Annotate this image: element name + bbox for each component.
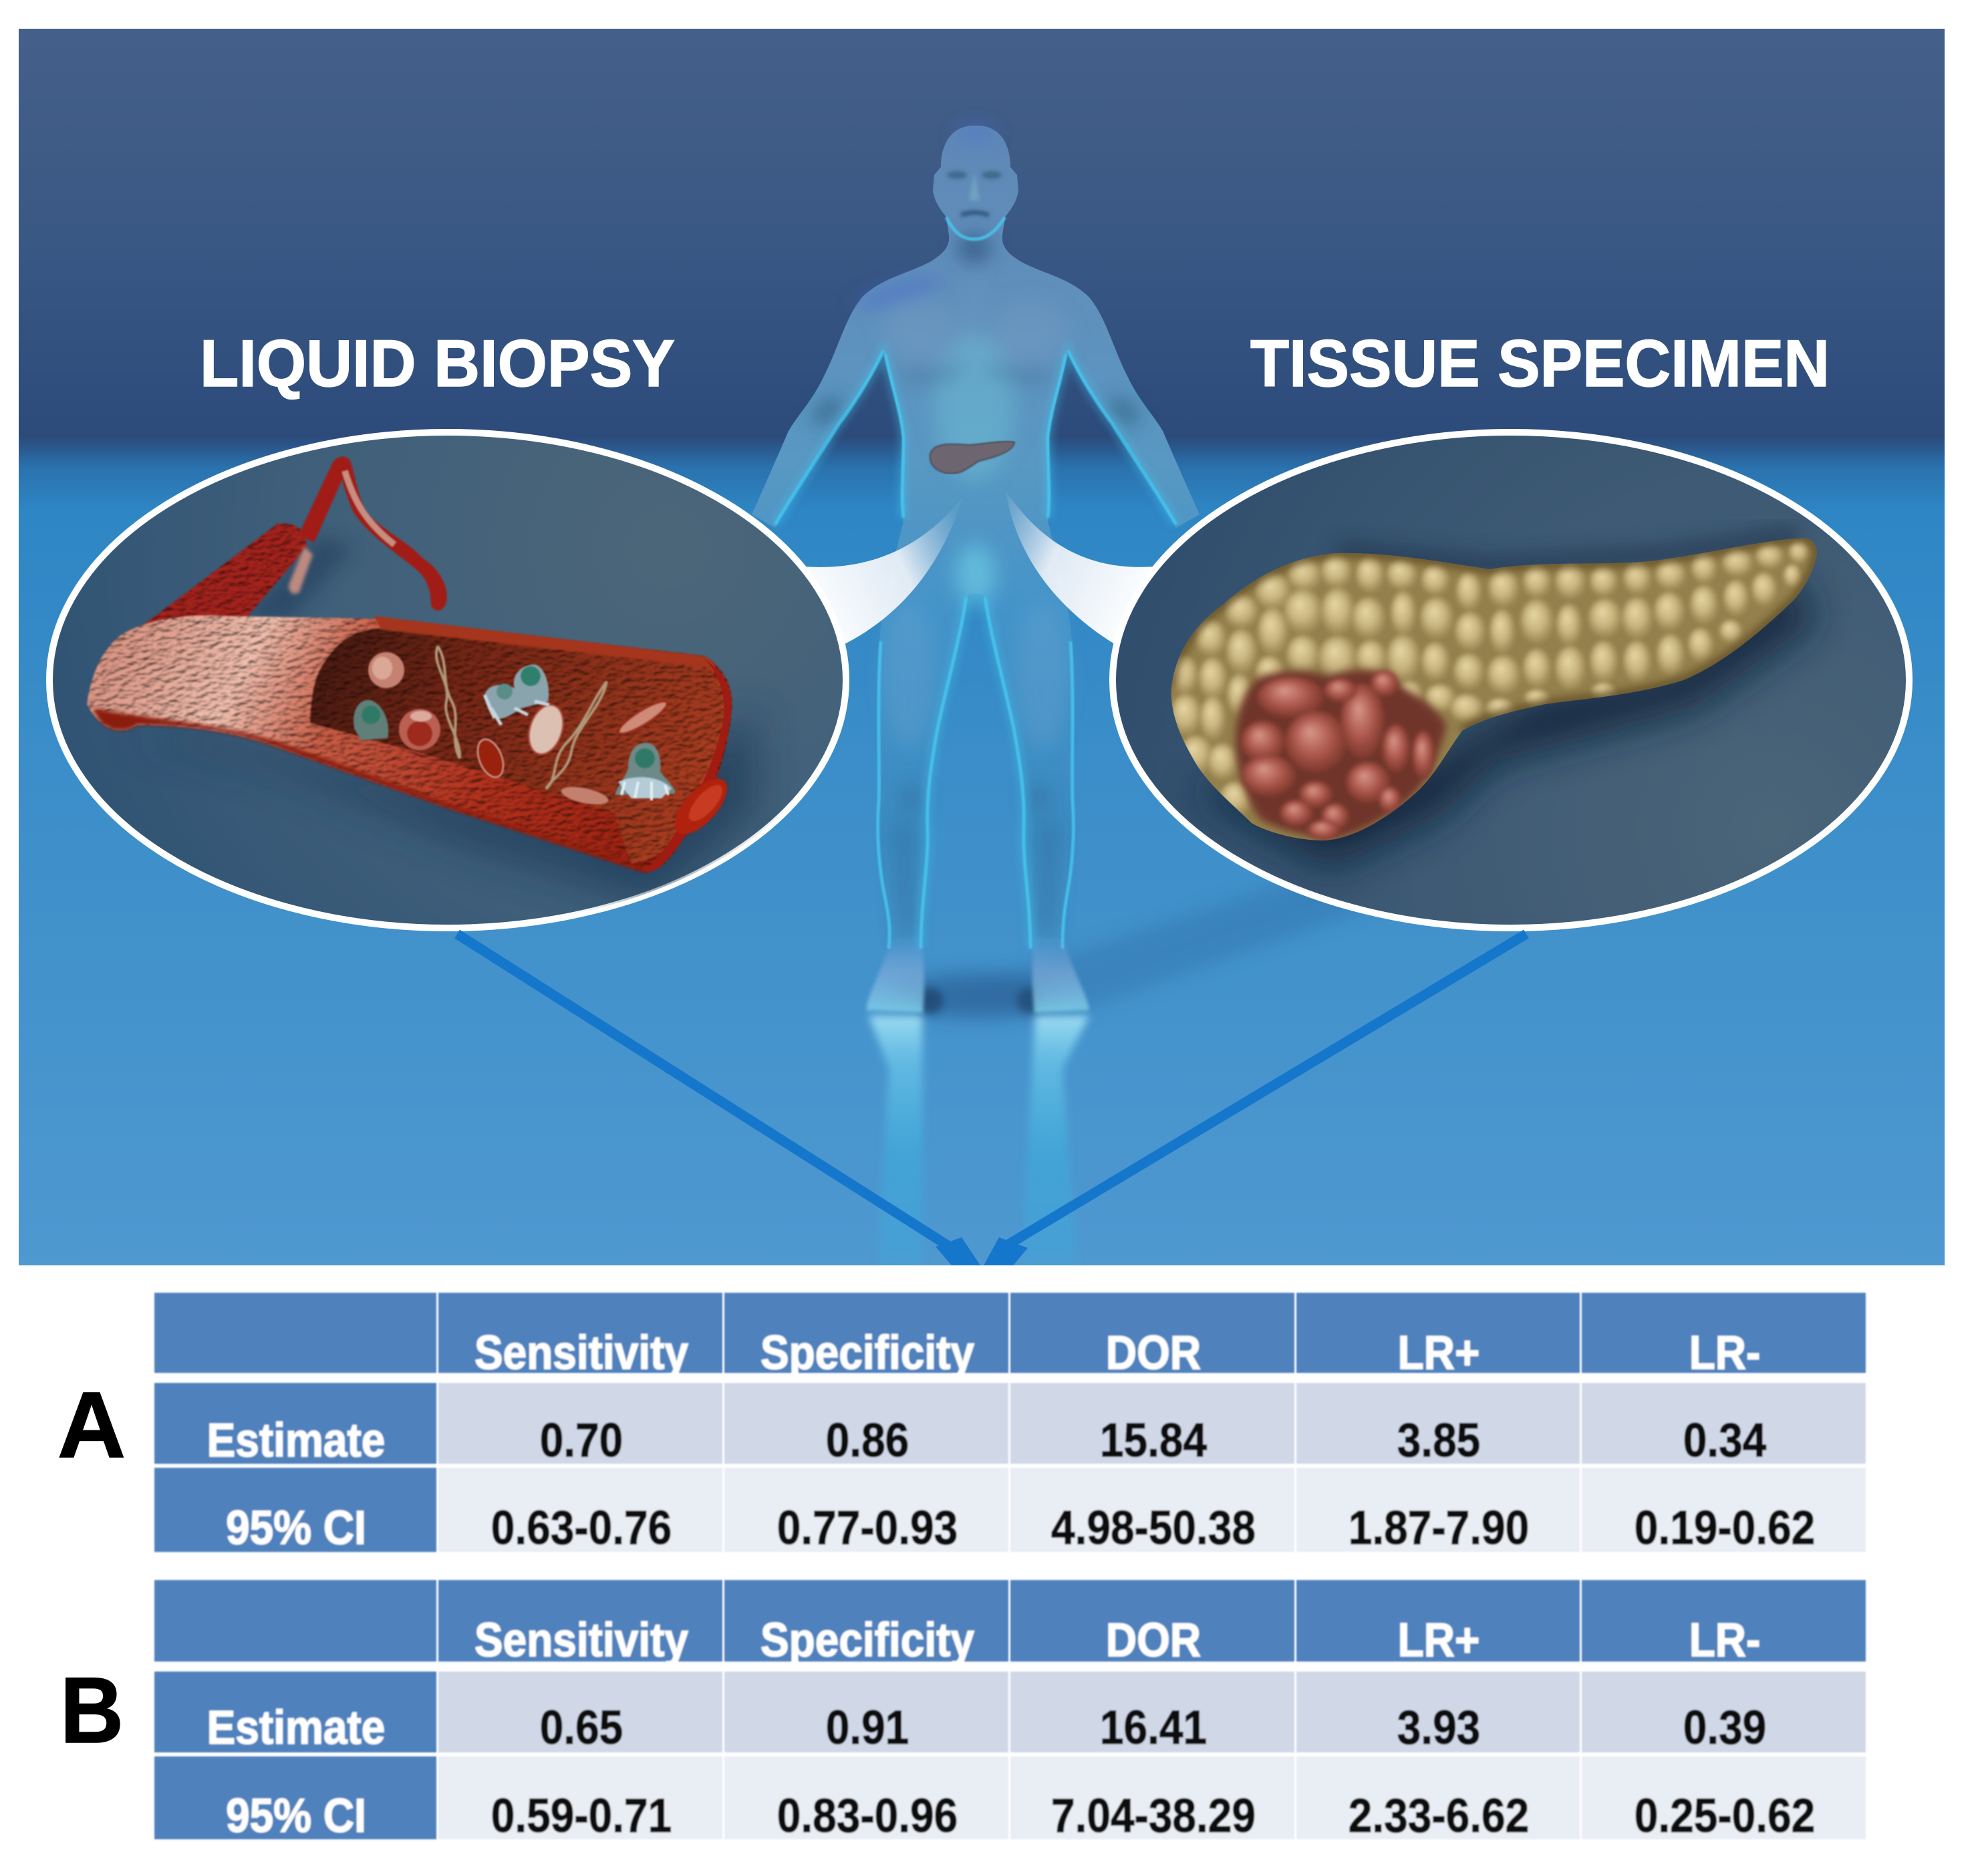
- confidence interval row cells: [438, 1756, 1866, 1839]
- body silhouette: [752, 126, 1200, 942]
- ribbon: right: [1006, 491, 1155, 644]
- table B header labels: LR+: [1398, 1613, 1480, 1667]
- table A confidence intervals: 0.77-0.93: [777, 1501, 958, 1555]
- title: tissue specimen: TISSUE SPECIMEN: [1250, 326, 1830, 400]
- table A: [154, 1293, 1866, 1555]
- table A estimate values: Estimate: [207, 1414, 385, 1467]
- vessel outer wall: [87, 615, 732, 873]
- panel: tissue specimen circle: [1113, 432, 1909, 928]
- ribbon: left: [805, 498, 962, 644]
- table B confidence intervals: 7.04-38.29: [1051, 1789, 1256, 1843]
- table B estimate values: Estimate: [207, 1701, 385, 1754]
- estimate row cells: [438, 1383, 1866, 1464]
- header row: [154, 1580, 1866, 1839]
- table B header labels: [474, 1613, 1760, 1667]
- figure reflection on the floor: [869, 1015, 1089, 1265]
- table A estimate values: [207, 1414, 1766, 1467]
- confidence interval row cells: [438, 1468, 1866, 1552]
- icon: small pancreas in abdomen: [930, 442, 1014, 474]
- title: liquid biopsy: LIQUID BIOPSY: [200, 326, 675, 400]
- human figure: [752, 126, 1200, 1014]
- label B: B: [60, 1658, 124, 1762]
- tumour lobes: [1241, 670, 1435, 840]
- table B confidence intervals: 0.83-0.96: [777, 1789, 958, 1843]
- pancreas body: [1163, 528, 1831, 848]
- glowing body outlines: [775, 217, 1176, 949]
- label A: A: [57, 1372, 126, 1477]
- table A header labels: LR-: [1689, 1326, 1760, 1380]
- table B estimate values: 3.93: [1397, 1701, 1480, 1754]
- table A estimate values: 3.85: [1397, 1414, 1480, 1467]
- table A header labels: LR+: [1398, 1326, 1480, 1380]
- pancreas shadow: [1189, 575, 1818, 869]
- table A confidence intervals: 1.87-7.90: [1349, 1501, 1529, 1555]
- table B header labels: DOR: [1106, 1613, 1201, 1667]
- face: [947, 171, 1002, 215]
- pancreas lumps: [1169, 540, 1810, 816]
- body shading: [815, 127, 1136, 935]
- table B confidence intervals: 0.59-0.71: [491, 1789, 672, 1843]
- table B confidence intervals: 95% CI: [226, 1789, 366, 1843]
- table A estimate values: 15.84: [1100, 1414, 1207, 1467]
- estimate row cells: [438, 1672, 1866, 1752]
- vessel underside shading: [94, 708, 645, 873]
- table A estimate values: 0.34: [1683, 1414, 1766, 1467]
- thick branch: [140, 522, 307, 627]
- header row: [154, 1293, 1866, 1552]
- table B estimate values: 0.39: [1683, 1701, 1766, 1754]
- table A header labels: Sensitivity: [474, 1326, 688, 1380]
- red blood cells: [364, 648, 736, 843]
- DNA strands: [436, 646, 607, 789]
- pancreas rim shading: [1171, 538, 1817, 731]
- table A confidence intervals: [226, 1501, 1815, 1555]
- table B estimate values: [207, 1701, 1766, 1754]
- table B confidence intervals: 0.25-0.62: [1635, 1789, 1815, 1843]
- table A confidence intervals: 0.63-0.76: [491, 1501, 672, 1555]
- table B confidence intervals: [226, 1789, 1815, 1843]
- table A estimate values: 0.70: [540, 1414, 623, 1467]
- arrow: liquid biopsy to table: [457, 934, 980, 1265]
- table A header labels: Specificity: [760, 1326, 974, 1380]
- illustration: blood vessel: [87, 457, 755, 902]
- table B header labels: LR-: [1689, 1613, 1760, 1667]
- panel: illustration background: [19, 29, 1945, 1265]
- table B estimate values: 0.91: [826, 1701, 909, 1754]
- table A confidence intervals: 0.19-0.62: [1635, 1501, 1815, 1555]
- tumour: [1236, 670, 1447, 839]
- white ribbons linking the figure to the circles: [805, 491, 1155, 644]
- vessel interior: [310, 629, 726, 864]
- thin branch: [299, 457, 447, 611]
- table B estimate values: 16.41: [1100, 1701, 1207, 1754]
- table A header labels: [474, 1326, 1760, 1380]
- table A confidence intervals: 4.98-50.38: [1051, 1501, 1256, 1555]
- table B estimate values: 0.65: [540, 1701, 623, 1754]
- table A confidence intervals: 95% CI: [226, 1501, 366, 1555]
- illustration: pancreas with tumour: [1163, 528, 1831, 869]
- tumour cells: [354, 665, 675, 800]
- table B confidence intervals: 2.33-6.62: [1349, 1789, 1529, 1843]
- glowing body outlines: halo: [775, 351, 1176, 949]
- floor shadow behind the figure: [907, 886, 1355, 1026]
- table B: [154, 1580, 1866, 1843]
- vessel inner rim: [645, 659, 731, 873]
- vessel shadow: [273, 707, 783, 913]
- table A estimate values: 0.86: [826, 1414, 909, 1467]
- table B header labels: Specificity: [760, 1613, 974, 1667]
- panel: liquid biopsy circle: [49, 432, 846, 928]
- table A header labels: DOR: [1106, 1326, 1201, 1380]
- vessel top rim: [374, 616, 716, 673]
- arrow: tissue specimen to table: [984, 934, 1526, 1265]
- icon: feet: [866, 935, 1089, 1014]
- table B header labels: Sensitivity: [474, 1613, 688, 1667]
